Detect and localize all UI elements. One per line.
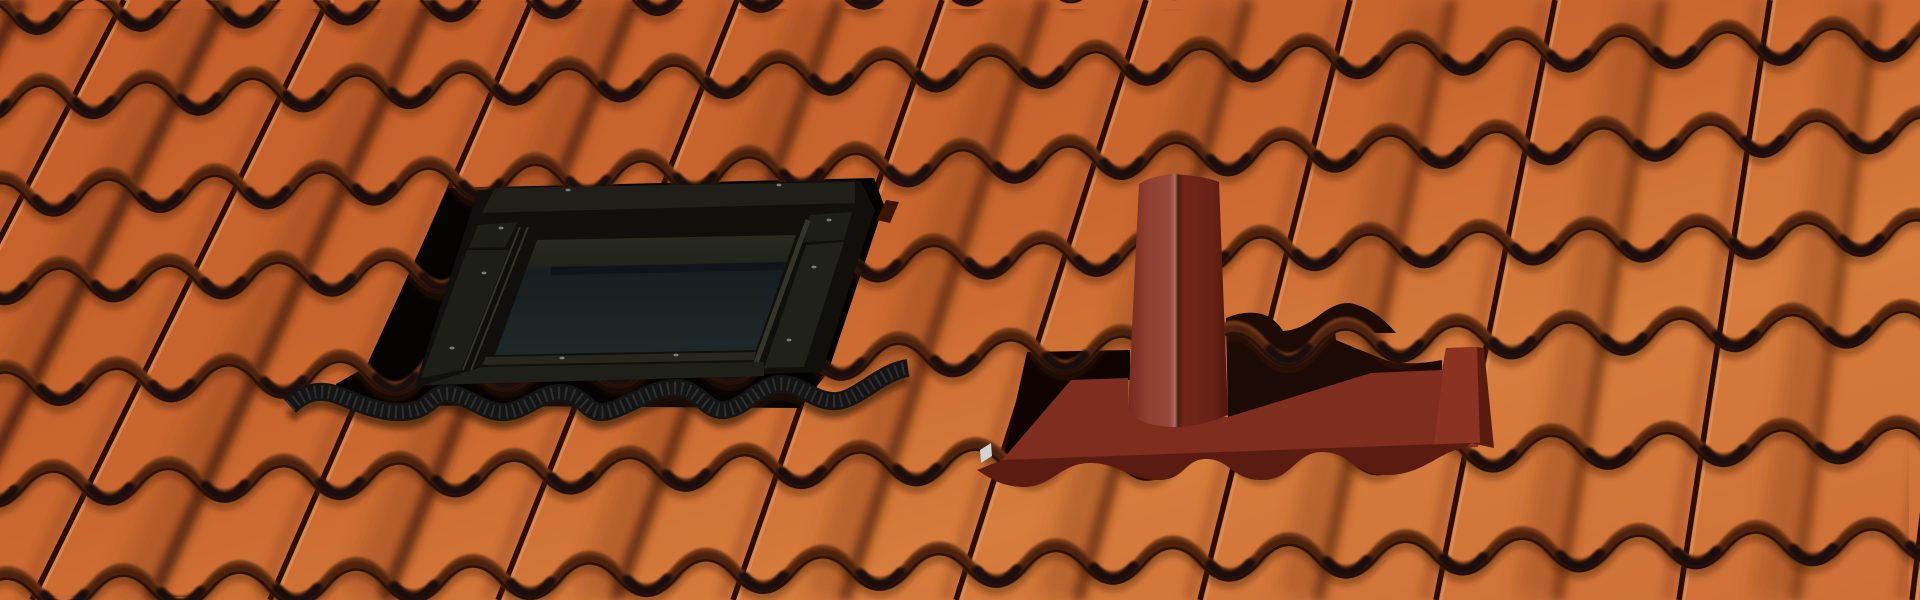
small white flashing corner [980,443,992,463]
glass pane [495,235,796,355]
upper right block [804,212,852,242]
skylight lead flashing [290,368,908,423]
dark recess and shadow behind vent [1004,303,1442,456]
scalloped front lip [977,443,1471,487]
top bar [482,182,855,213]
bottom frame bar [424,362,764,385]
upper left block [469,222,518,248]
flap side [1471,347,1494,448]
right sash strip [756,220,808,363]
skylight window [415,180,875,386]
vent pipe [1128,174,1228,427]
left sash strips [463,227,528,370]
vent base plate [977,347,1494,487]
bottom sash bar [482,352,756,365]
right rail [764,242,844,368]
upturned flap [1434,347,1482,446]
black recess around skylight [336,178,884,408]
reflection stripe [551,262,787,275]
left rail [421,250,509,378]
window frame backing [415,180,875,386]
shadow next to skylight [877,200,899,223]
screw heads [450,184,832,359]
plate top surface [1002,347,1478,460]
